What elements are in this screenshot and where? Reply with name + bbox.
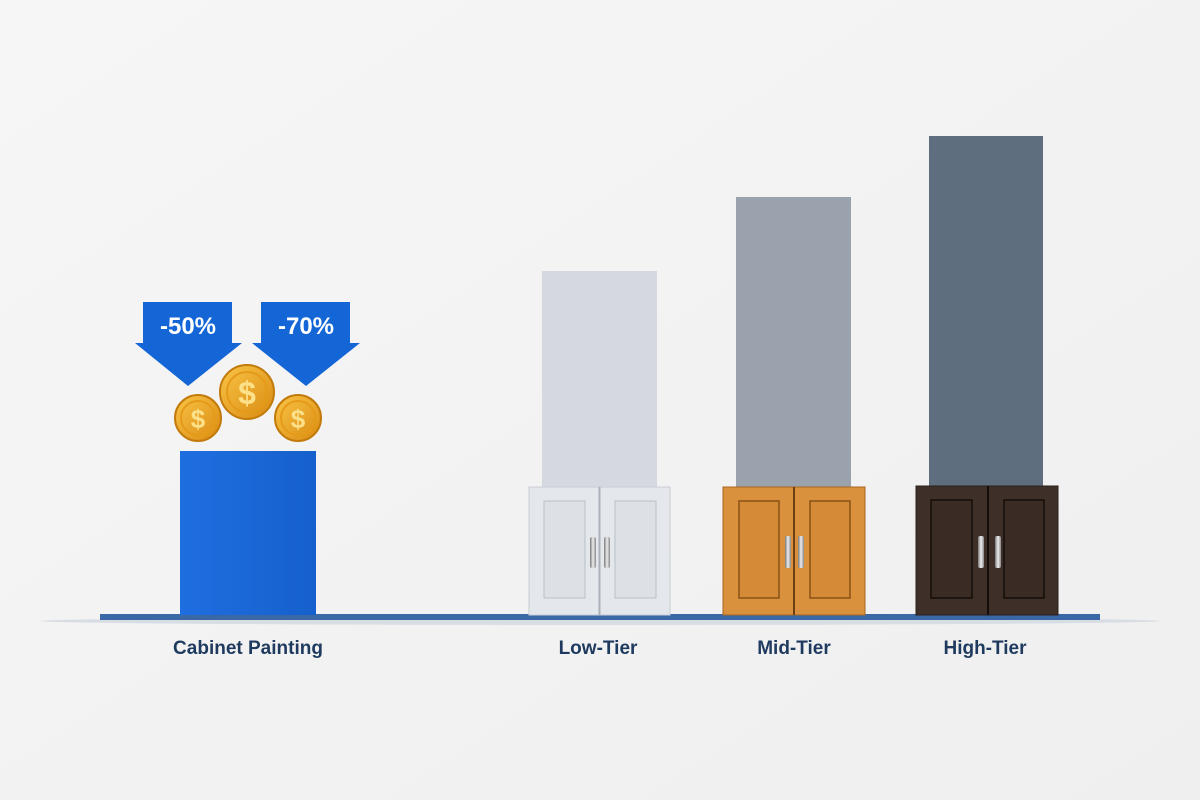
arrow: -70% — [252, 302, 360, 386]
icon: coins: $ — [191, 404, 206, 434]
arrow: -50%: -50% — [160, 313, 216, 340]
bar: mid-tier — [736, 197, 851, 488]
bar: low-tier — [542, 271, 657, 488]
icon: white cabinet — [529, 487, 670, 615]
label: High-Tier: High-Tier — [943, 638, 1027, 659]
bar: high-tier — [929, 136, 1043, 488]
icon: coins — [175, 365, 321, 441]
label: Low-Tier: Low-Tier — [559, 638, 638, 659]
arrow: -50% — [135, 302, 242, 386]
arrow: -70%: -70% — [278, 313, 334, 340]
icon: coins: $ — [291, 404, 306, 434]
baseline — [40, 614, 1160, 625]
icon: wood cabinet — [723, 487, 865, 615]
icon: dark cabinet — [916, 486, 1058, 615]
bar: cabinet painting — [180, 451, 316, 615]
icon: coins: $ — [238, 375, 256, 411]
label: Cabinet Painting: Cabinet Painting — [173, 638, 323, 659]
label: Mid-Tier: Mid-Tier — [757, 638, 831, 659]
